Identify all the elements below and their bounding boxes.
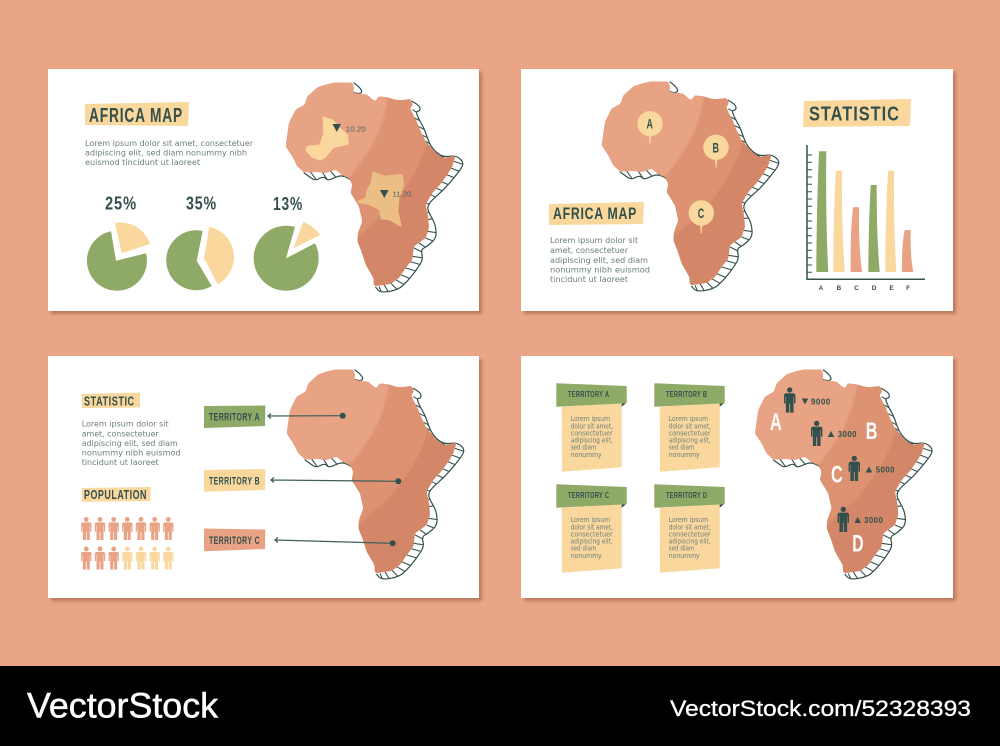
label: territory C [204,528,265,551]
stat: B 3000 [811,421,857,446]
bar A [816,151,828,272]
pin A: A [646,116,654,132]
card: territory D: nonummy [669,552,700,560]
text block: intro: euismod tincidunt ut laoreet [85,157,201,167]
text block: intro: Lorem ipsum dolor sit amet, consectetuer [85,138,254,148]
card: territory A: dolor sit amet, [571,422,613,430]
region letters: B [866,418,877,445]
card: territory A: adipiscing elit, [571,437,613,445]
card: territory B: Lorem ipsum [669,415,708,423]
card: territory D: sed diam [669,545,695,553]
card: territory D: TERRITORY D [666,490,707,500]
stat: A 9000 [784,387,831,413]
card: territory A: Lorem ipsum [571,415,610,423]
panel: statistic, population and territories [48,356,482,601]
pin C [689,200,714,234]
stat: D 3000: 3000 [864,515,883,525]
text block: description: adipiscing elit, sed diam [550,255,648,265]
heading: africa map small [549,202,644,225]
card: territory C: consectetuer [571,530,613,538]
heading: africa map [85,102,189,127]
card: territory D [654,484,725,573]
text block: statistic: tincidunt ut laoreet [82,457,159,467]
footer bar [0,666,1000,746]
card: territory C: TERRITORY C [568,490,609,500]
bar F [902,230,913,272]
map: africa with population stats [750,365,937,582]
card: territory D: adipiscing elit, [669,538,711,546]
card: territory D: consectetuer [669,530,711,538]
card: territory C [556,484,627,573]
footer url: VectorStock.com/52328393 [670,696,971,721]
text block: intro: adipiscing elit, sed diam nonummy nibh [85,148,247,158]
region letters: D [852,531,864,558]
text block: statistic: adipiscing elit, sed diam [82,438,178,448]
region letters: C [831,462,843,489]
heading: statistic small: STATISTIC [84,393,135,408]
label: territory A: TERRITORY A [209,412,260,424]
text block: intro [85,138,254,167]
heading: statistic: STATISTIC [809,104,900,126]
arrow: territory C [275,538,396,546]
card: territory D: dolor sit amet, [669,523,711,531]
card: territory A: consectetuer [571,429,613,437]
card: territory B: TERRITORY B [666,389,707,399]
arrow: territory B [271,478,401,484]
region letters: A [770,409,782,436]
axis labels [818,285,910,292]
bar B [833,171,845,272]
text block: statistic: nonummy nibh euismod [82,448,181,458]
card: territory B: consectetuer [669,429,711,437]
text block: statistic: Lorem ipsum dolor sit [82,419,169,429]
axis labels: E [889,285,894,292]
card: territory C: nonummy [571,552,602,560]
card: territory C: Lorem ipsum [571,516,610,524]
card: territory B: adipiscing elit, [669,437,711,445]
text block: description [550,235,650,284]
text block: description: tincidunt ut laoreet [550,274,629,284]
label: territory B [204,469,265,492]
pie chart: 13% [254,194,320,291]
heading: africa map: AFRICA MAP [89,105,183,127]
bar chart [807,145,925,292]
panel: territories and population map [521,356,956,601]
pin B: B [712,139,720,155]
pin A [637,111,663,144]
axis labels: C [854,285,859,292]
text block: statistic: amet, consectetuer [82,428,159,438]
marker: 10.20 [332,124,366,133]
card: territory A [556,383,627,472]
pie chart: 25% [87,194,150,291]
heading: population: POPULATION [84,487,147,502]
footer logo: VectorStock [27,686,219,726]
axis labels: A [818,285,824,292]
text block: description: nonummy nibh euismod [550,264,650,274]
bar C [851,207,862,272]
card: territory C: sed diam [571,545,597,553]
bar E [885,171,896,272]
pie chart: 25%: 25% [105,194,137,214]
stat: A 9000: 9000 [811,396,831,406]
marker: 11.20 [380,189,411,198]
card: territory A: TERRITORY A [568,389,609,399]
stat: B 3000: 3000 [838,429,857,439]
label: territory A [204,406,265,428]
pin B [703,135,729,168]
label: territory B: TERRITORY B [209,475,260,487]
card: territory B: dolor sit amet, [669,422,711,430]
pie chart: 13%: 13% [273,194,303,214]
card: territory B [654,383,725,472]
bar D [868,185,880,272]
axis labels: B [836,285,842,292]
card: territory C: adipiscing elit, [571,538,613,546]
panel: africa map with pie charts [48,69,482,314]
marker: 10.20: 10.20 [346,124,366,133]
card: territory A: sed diam [571,444,597,452]
region letters [770,409,877,558]
card: territory D: Lorem ipsum [669,516,708,524]
stat: D 3000 [838,507,883,532]
text block: description: Lorem ipsum dolor sit [550,235,639,245]
text block: description: amet, consectetuer [550,245,629,255]
map: africa with highlighted countries [281,78,467,295]
card: territory C: dolor sit amet, [571,523,613,531]
map: africa with pins [597,77,783,294]
pie chart: 35%: 35% [186,194,217,214]
arrow: territory A [268,413,346,419]
pie chart: 35% [166,194,234,290]
card: territory B: sed diam [669,444,695,452]
label: territory C: TERRITORY C [209,535,260,547]
card: territory A: nonummy [571,451,602,459]
pictogram: population [81,517,174,570]
axis labels: F [906,285,910,292]
heading: statistic [803,99,911,127]
axis labels: D [872,285,877,292]
pin C: C [698,205,705,221]
map: africa with territory points [282,365,468,582]
panel: map with pins and bar chart [521,69,956,314]
marker: 11.20: 11.20 [393,189,411,198]
card: territory B: nonummy [669,451,700,459]
heading: africa map small: AFRICA MAP [553,204,637,223]
stat: C 5000 [849,456,895,481]
stat: C 5000: 5000 [876,464,895,474]
text block: statistic [82,419,181,467]
